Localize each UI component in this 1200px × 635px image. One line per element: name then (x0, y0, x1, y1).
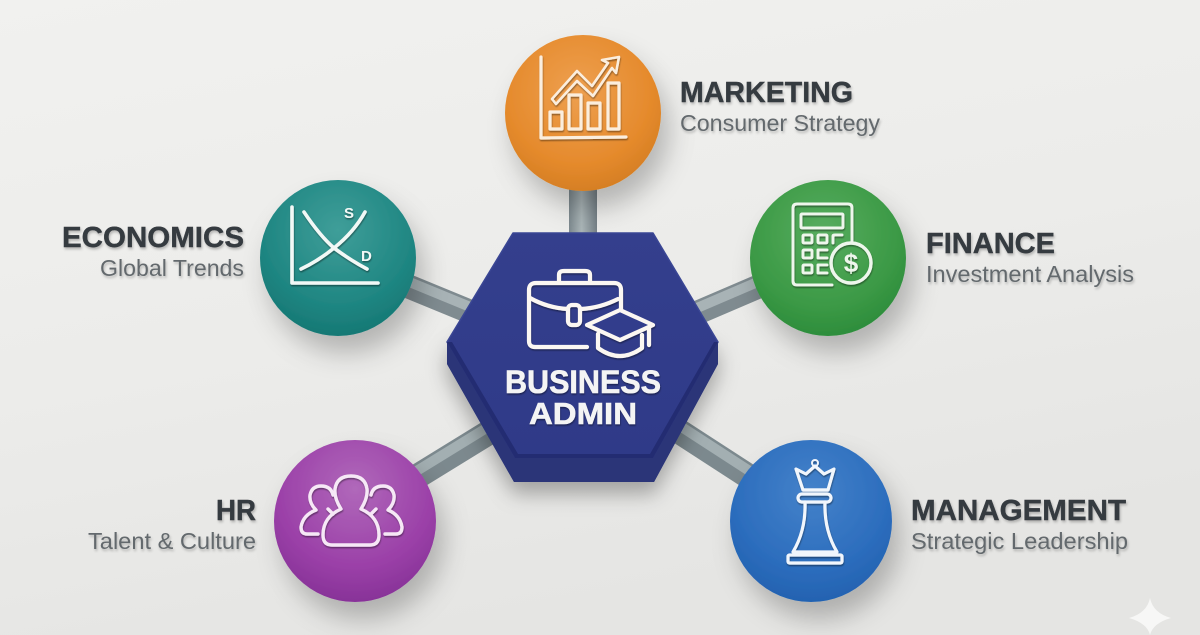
label: marketing (680, 77, 881, 136)
icon: supply and demand chart (292, 205, 378, 283)
label: economics (62, 222, 244, 281)
central hexagon: business admin (447, 233, 718, 482)
label: marketing: MARKETING (680, 77, 853, 109)
icon: supply and demand chart: S (344, 205, 354, 222)
icon: calculator with dollar coin: $ (844, 248, 859, 278)
icon: calculator with dollar coin (793, 204, 871, 285)
label: management (911, 495, 1128, 554)
connector: marketing (569, 178, 597, 240)
icon: three people (301, 476, 402, 545)
label: marketing: Consumer Strategy (680, 110, 881, 136)
label: hr: Talent & Culture (88, 528, 256, 554)
label: finance (926, 228, 1134, 287)
label: hr: HR (216, 495, 256, 527)
node: management (730, 440, 892, 602)
icon: sparkle watermark (1129, 598, 1171, 635)
connector: management (674, 424, 751, 476)
node: marketing (505, 35, 661, 191)
label: economics: ECONOMICS (62, 222, 244, 254)
label: management: Strategic Leadership (911, 528, 1128, 554)
connector: economics (405, 281, 480, 315)
node: hr (274, 440, 436, 602)
label: finance: Investment Analysis (926, 261, 1134, 287)
label: business admin (505, 364, 661, 431)
label: management: MANAGEMENT (911, 495, 1126, 527)
icon: rising bar chart (541, 57, 626, 138)
label: hr (88, 495, 256, 554)
label: finance: FINANCE (926, 228, 1055, 260)
icon: chess queen (788, 460, 842, 563)
connector: hr (415, 424, 496, 476)
node: economics (260, 180, 416, 336)
icon: supply and demand chart: D (361, 248, 372, 265)
icon: briefcase and graduation cap (529, 271, 653, 356)
label: business admin: BUSINESS (505, 364, 661, 400)
connector: finance (690, 281, 762, 315)
node: finance (750, 180, 906, 336)
label: business admin: ADMIN (529, 396, 637, 431)
label: economics: Global Trends (100, 255, 244, 281)
